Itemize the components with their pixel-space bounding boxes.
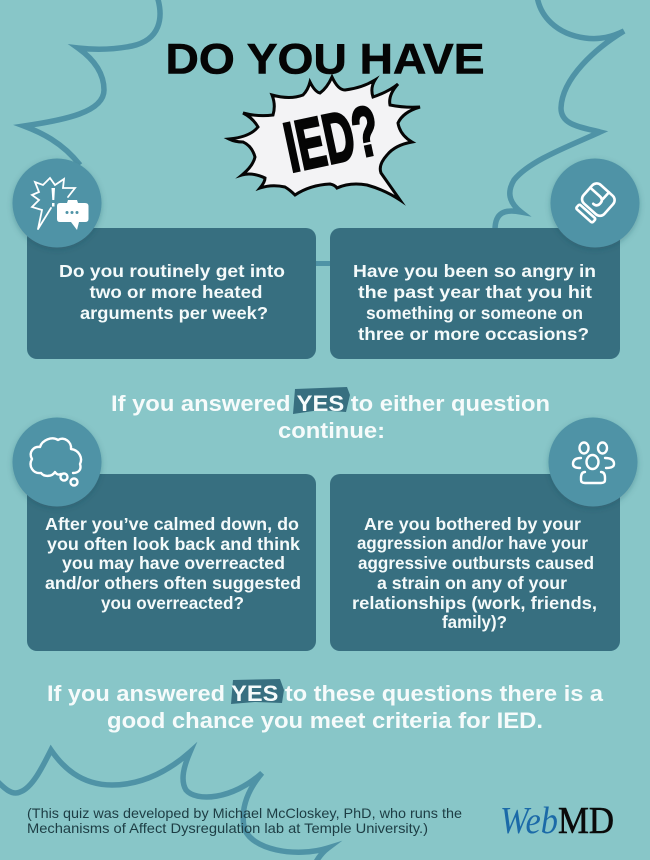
panel: aggression and relationships question	[330, 474, 620, 651]
question text: aggressive outbursts caused	[358, 553, 594, 573]
highlight swatch behind second YES	[231, 679, 284, 704]
question text: aggression and/or have your	[357, 533, 588, 553]
question text: you overreacted?	[101, 593, 244, 613]
question text: relationships (work, friends,	[352, 593, 597, 613]
question text: two or more heated	[90, 282, 262, 302]
panel: heated arguments question	[27, 228, 316, 359]
card background	[330, 228, 620, 359]
icon: thought cloud	[12, 418, 102, 506]
question text: Have you been so angry in	[353, 261, 596, 281]
question text: you may have overreacted	[62, 553, 285, 573]
question text: Do you routinely get into	[59, 261, 285, 281]
card background	[330, 474, 620, 651]
title: do you have: DO YOU HAVE	[166, 36, 484, 84]
burst outline: bottom	[0, 750, 328, 860]
connector between first two cards	[316, 261, 330, 266]
burst outline: top right	[495, 0, 624, 230]
question text: the past year that you hit	[358, 282, 592, 302]
question text: arguments per week?	[80, 303, 268, 323]
icon: argument burst and speech bubble	[12, 158, 102, 248]
instruction text: continue: continue:	[278, 418, 385, 443]
icon: group of people	[548, 418, 638, 506]
question text: Are you bothered by your	[364, 514, 581, 534]
panel: anger and hitting question	[330, 228, 620, 359]
conclusion text: If you answered YES to these questions there is a	[47, 681, 604, 706]
burst outline: top left	[24, 0, 160, 165]
conclusion text: good chance you meet criteria for IED.	[107, 708, 543, 733]
highlight swatch behind first YES	[293, 387, 350, 414]
title burst: IED?	[229, 77, 420, 200]
question text: and/or others often suggested	[45, 573, 301, 593]
instruction text: continue: If you answered YES to either question	[111, 391, 550, 416]
title word: IED?	[278, 91, 386, 187]
question text: family)?	[442, 612, 507, 632]
question text: you often look back and think	[47, 534, 300, 554]
speech burst shape	[229, 77, 420, 200]
card background	[27, 228, 316, 359]
question text: something or someone on	[366, 303, 583, 323]
WebMD logo: Web	[500, 800, 558, 842]
question text: After you’ve calmed down, do	[45, 514, 299, 534]
question text: a strain on any of your	[377, 573, 567, 593]
footnote: Mechanisms of Affect Dysregulation lab at Temple University.)	[27, 820, 428, 836]
footnote: (This quiz was developed by Michael McCloskey, PhD, who runs the	[27, 805, 462, 821]
WebMD logo: MD	[558, 800, 614, 842]
card background	[27, 474, 316, 651]
icon: clenched fist	[550, 158, 640, 248]
question text: three or more occasions?	[358, 324, 589, 344]
panel: overreaction question	[27, 474, 316, 651]
